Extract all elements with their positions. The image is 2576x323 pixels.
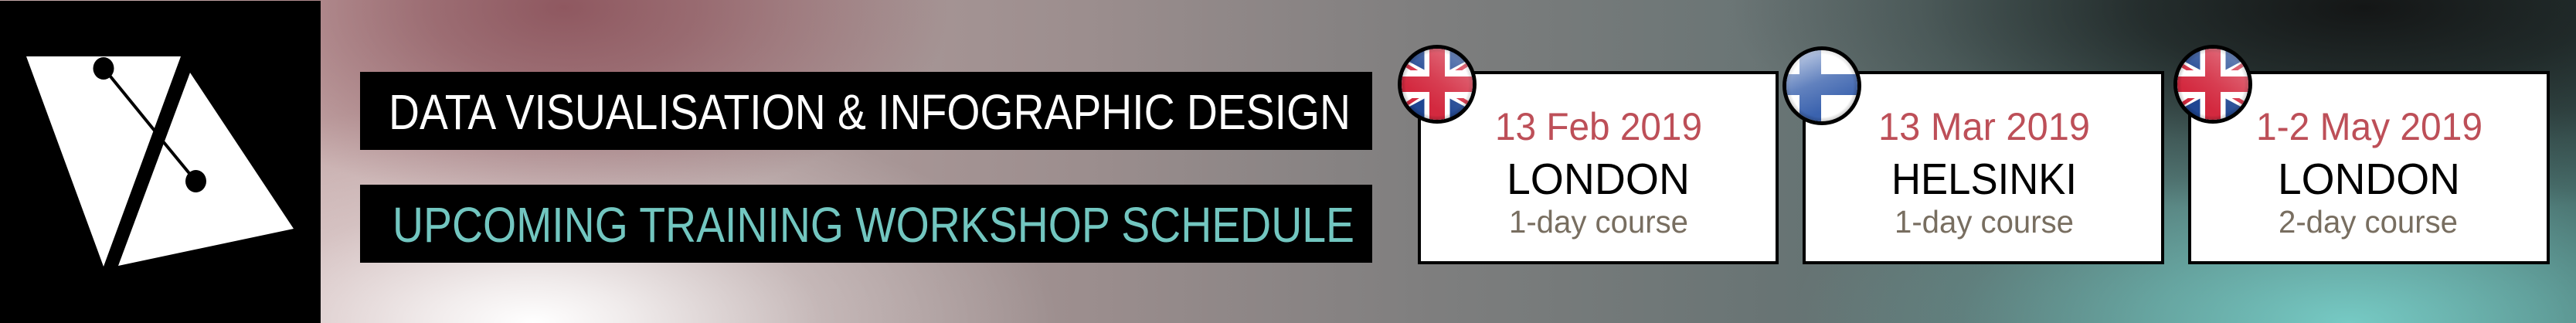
card: Helsinki 13 Mar 2019 (1804, 73, 2163, 263)
logo: left triangle (26, 56, 181, 267)
logo: right triangle (118, 73, 294, 266)
icon: UK flag, London May (2171, 45, 2255, 124)
city: LONDON (1507, 155, 1690, 204)
duration: 1-day course (1895, 204, 2074, 240)
duration: 2-day course (2279, 204, 2458, 240)
card: London 13 Feb 2019 (1419, 73, 1777, 263)
date: 13 Feb 2019 (1495, 105, 1702, 148)
city: LONDON (2278, 155, 2460, 204)
subtitle banner (360, 185, 1372, 263)
city: HELSINKI (1891, 155, 2077, 204)
icon: Finland flag, Helsinki (1782, 46, 1861, 125)
date: 13 Mar 2019 (1878, 105, 2090, 148)
duration: 1-day course (1509, 204, 1688, 240)
title banner (360, 72, 1372, 150)
logo panel (0, 1, 321, 323)
date: 1-2 May 2019 (2256, 105, 2483, 148)
logo: connected dots (93, 57, 206, 192)
title banner: DATA VISUALISATION & INFOGRAPHIC DESIGN (389, 84, 1351, 140)
card: London 1-2 May 2019 (2190, 73, 2548, 263)
icon: UK flag, London February (1395, 45, 1479, 124)
subtitle banner: UPCOMING TRAINING WORKSHOP SCHEDULE (393, 197, 1354, 253)
